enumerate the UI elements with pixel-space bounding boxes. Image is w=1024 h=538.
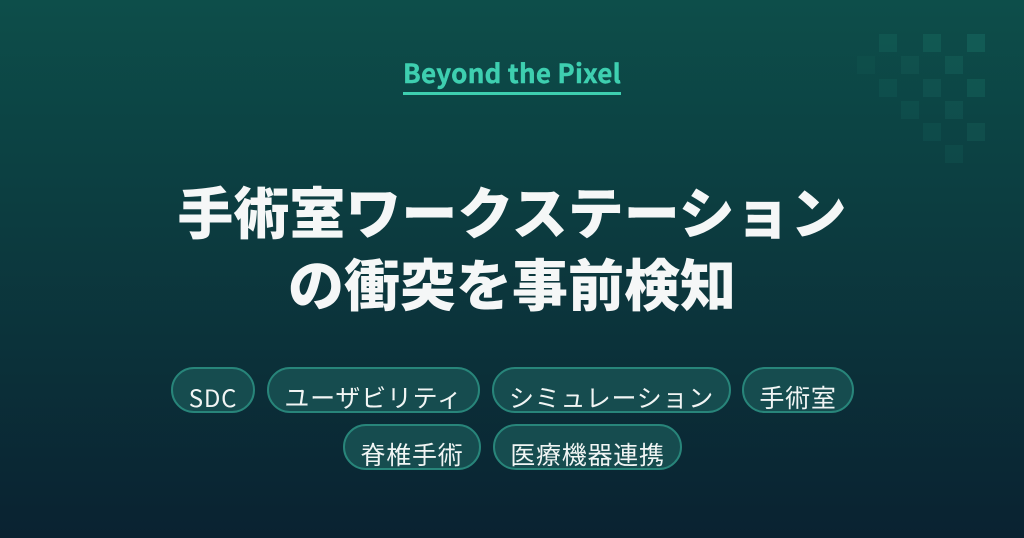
tag: SDC: SDC [189, 379, 237, 413]
decorative pixel pattern [879, 34, 985, 141]
tag: 医療機器連携 [493, 424, 682, 470]
tag: 脊椎手術 [343, 424, 481, 470]
tag: ユーザビリティ [267, 367, 480, 413]
title: の衝突を事前検知 [288, 242, 736, 323]
brand label: Beyond the Pixel: Beyond the Pixel [403, 54, 621, 91]
title [177, 170, 847, 323]
title: 手術室ワークステーション [177, 170, 847, 251]
tag: 手術室 [742, 367, 854, 413]
tag: SDC [171, 367, 255, 413]
tag: シミュレーション [492, 367, 731, 413]
